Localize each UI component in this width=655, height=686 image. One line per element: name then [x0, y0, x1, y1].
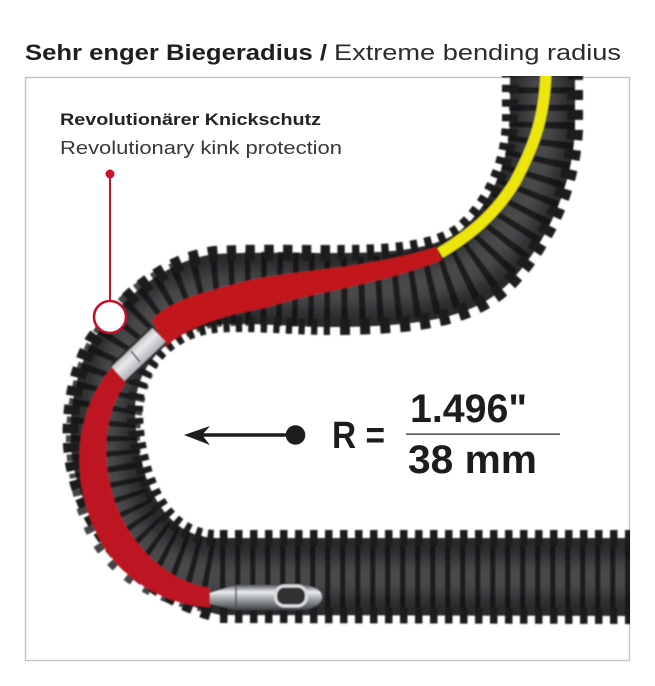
radius formula — [332, 387, 560, 482]
title — [25, 40, 621, 65]
callout text: Revolutionary kink protection — [60, 137, 342, 158]
yellow cable — [440, 70, 546, 253]
title: Sehr enger Biegeradius / — [25, 40, 327, 65]
callout marker — [94, 170, 126, 333]
radius formula: 1.496" — [410, 387, 527, 431]
radius arrow — [184, 425, 305, 445]
radius formula: R = — [332, 415, 385, 457]
pulling head — [210, 585, 322, 610]
callout text: Revolutionärer Knickschutz — [60, 110, 321, 129]
silver connector — [118, 335, 159, 374]
panel frame — [26, 78, 630, 660]
callout text — [60, 110, 342, 158]
hose body — [71, 70, 640, 616]
hose rib teeth — [71, 70, 640, 616]
red sleeve lower — [79, 367, 210, 607]
hose cross grooves — [103, 70, 640, 577]
corrugated hose — [71, 70, 640, 616]
hose highlight band — [103, 70, 640, 577]
red sleeve upper — [152, 247, 442, 347]
title: Extreme bending radius — [334, 40, 621, 65]
radius formula: 38 mm — [408, 438, 537, 482]
